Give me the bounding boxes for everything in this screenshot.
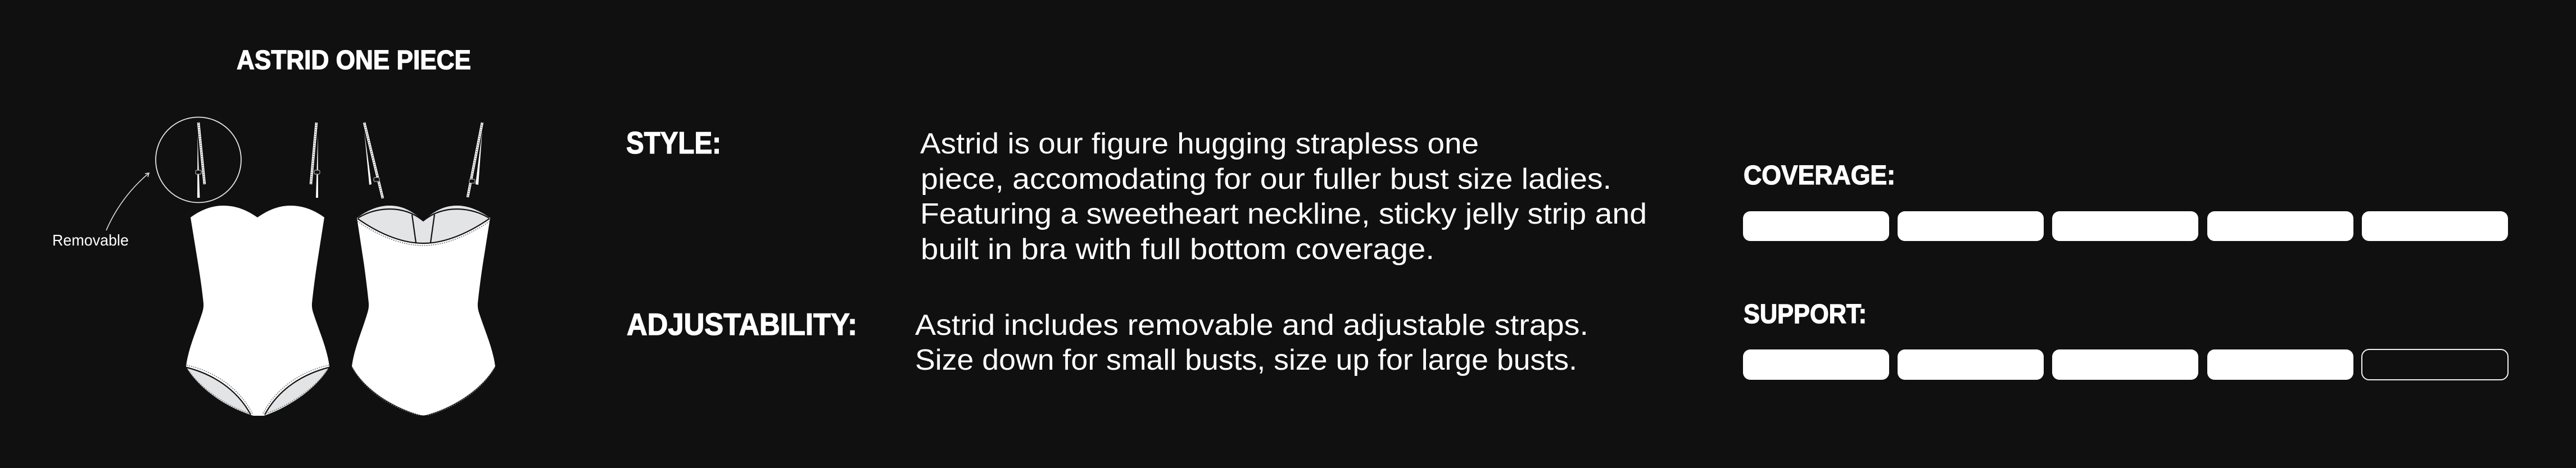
icon: swimsuit back view bbox=[352, 206, 495, 416]
heading: style: STYLE: bbox=[626, 125, 721, 160]
text block: style description: Astrid is our figure hugging strapless one bbox=[920, 128, 1479, 160]
rating bars: coverage 5 of 5 bbox=[1743, 211, 2508, 241]
heading: adjustability: ADJUSTABILITY: bbox=[627, 307, 857, 342]
text block: style description: piece, accomodating for our fuller bust size ladies. bbox=[921, 163, 1611, 196]
text block: style description: Featuring a sweetheart neckline, sticky jelly strip and bbox=[920, 198, 1647, 230]
panel: adjustability section bbox=[627, 307, 1588, 376]
callout: removable straps magnifier circle bbox=[156, 117, 241, 202]
text block: adjustability description bbox=[915, 309, 1588, 376]
removable label: Removable bbox=[52, 231, 129, 249]
icon: swimsuit front view bbox=[186, 206, 329, 416]
leg lining left bbox=[187, 365, 253, 415]
back leg stitching bbox=[352, 367, 495, 415]
inner bra lining bbox=[357, 206, 490, 246]
panel: garment illustrations bbox=[52, 117, 495, 416]
icon: front left strap bbox=[196, 122, 205, 198]
arrow: removable pointer bbox=[106, 173, 149, 230]
text block: adjustability description: Astrid includes removable and adjustable straps. bbox=[915, 309, 1588, 342]
title: ASTRID ONE PIECE bbox=[237, 46, 471, 75]
icon: front right strap bbox=[311, 122, 320, 198]
leg lining right bbox=[262, 365, 329, 415]
panel: coverage rating bbox=[1743, 161, 2508, 241]
icon: back right strap bbox=[468, 122, 482, 197]
text block: adjustability description: Size down for small busts, size up for large busts. bbox=[915, 344, 1577, 376]
text block: style description bbox=[920, 128, 1647, 266]
icon: back left strap bbox=[364, 122, 383, 198]
heading: support: SUPPORT: bbox=[1744, 299, 1867, 329]
heading: coverage: COVERAGE: bbox=[1744, 161, 1895, 190]
rating bars: support 4 of 5 bbox=[1743, 349, 2508, 380]
text block: style description: built in bra with full bottom coverage. bbox=[921, 233, 1434, 266]
panel: style section bbox=[626, 125, 1647, 266]
panel: support rating bbox=[1743, 299, 2508, 380]
